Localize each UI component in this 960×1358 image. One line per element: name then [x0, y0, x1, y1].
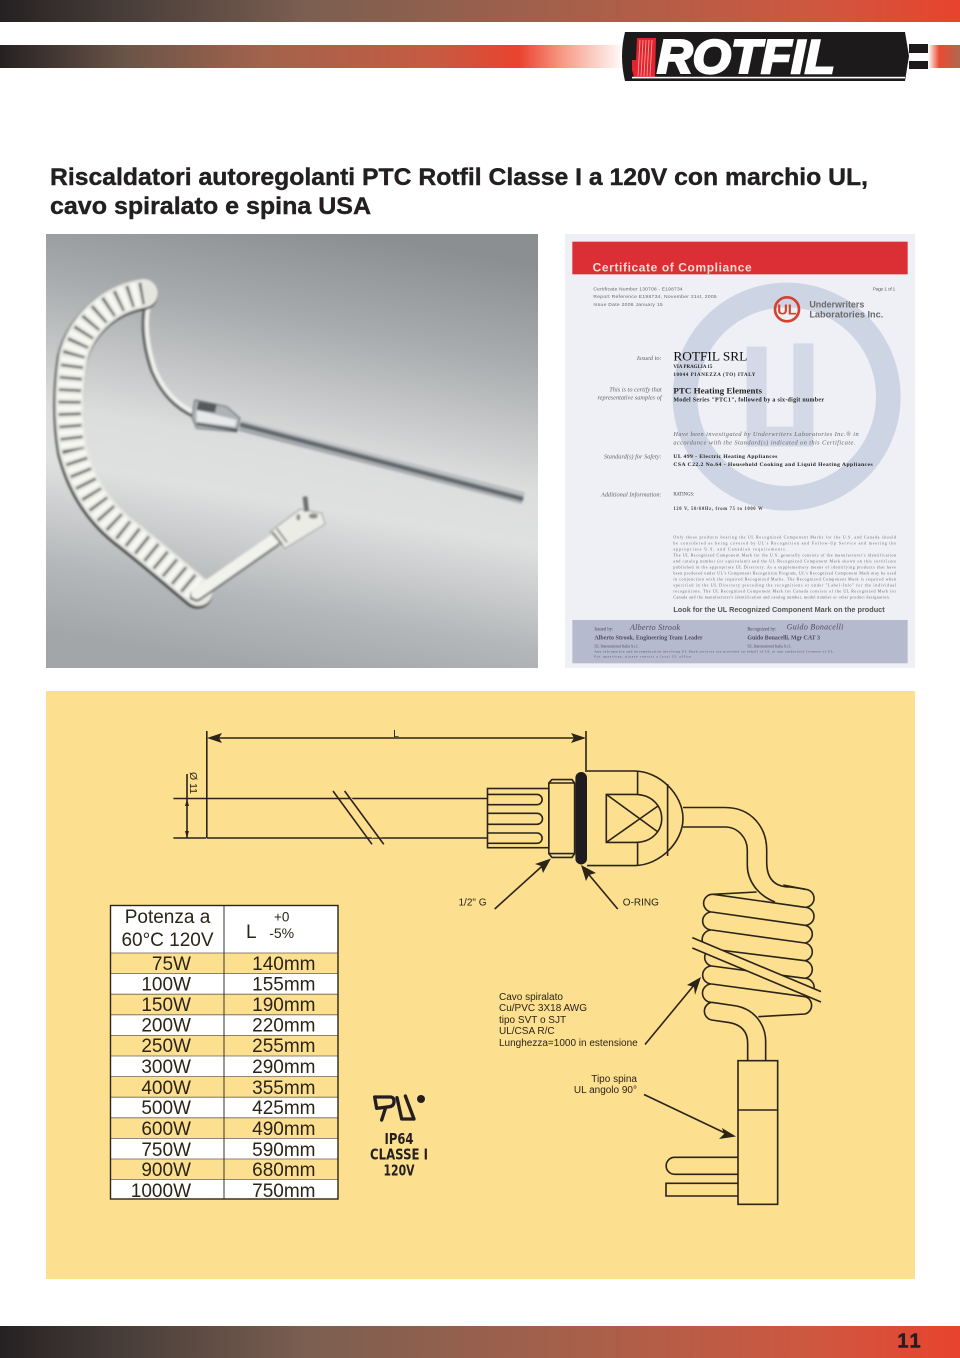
photo: UL certificate of compliance: Alberto Strook, Engineering Team Leader: [594, 635, 703, 641]
table rows: 300W: [141, 1057, 191, 1078]
table header: 60°C 120V: [121, 930, 214, 951]
photo: UL certificate of compliance: CSA C22.2 No.64 - Household Cooking and Liquid Heating Appliances: [673, 462, 873, 468]
photo: UL certificate of compliance: published in the appropriate UL Directory. As a supplementary means of identifying products that have: [673, 565, 896, 570]
table rows: 750mm: [252, 1181, 316, 1202]
photo: UL certificate of compliance: Underwriters: [809, 300, 864, 310]
photo: UL certificate of compliance: Guido Bonacelli, Mgr CAT 3: [747, 635, 820, 641]
text: plug type: UL angolo 90°: [574, 1085, 637, 1096]
table rows: 900W: [141, 1160, 191, 1181]
table rows: 490mm: [252, 1119, 316, 1140]
top header bar: [0, 0, 960, 22]
title: cavo spiralato e spina USA: [50, 193, 371, 220]
table rows: 500W: [141, 1098, 191, 1119]
photo: heating element with coiled cable: [46, 234, 538, 668]
photo: UL certificate of compliance: accordance with the Standard(s) indicated on this Certificate.: [673, 440, 856, 447]
photo: UL certificate of compliance: 10044 PIANEZZA (TO) ITALY: [673, 373, 756, 378]
photo: UL certificate of compliance: UL International Italia S.r.l.: [594, 643, 638, 648]
table header: -5%: [269, 925, 294, 941]
table rows: 150W: [141, 995, 191, 1016]
photo: UL certificate of compliance: The UL Recognized Component Mark for the U.S. generally consists of the manufacturer's identification: [673, 553, 896, 558]
photo: UL certificate of compliance: For questions, please contact a local UL office: [594, 654, 692, 659]
photo: UL certificate of compliance: Standard(s) for Safety:: [604, 454, 662, 461]
plug: [666, 1061, 778, 1204]
photo: UL certificate of compliance: Issue Date 2006 January 15: [593, 302, 663, 308]
O-ring: [575, 772, 587, 864]
photo: UL certificate of compliance: Additional Information:: [600, 491, 662, 498]
photo: UL certificate of compliance: 120 V, 50/60Hz, from 75 to 1000 W: [673, 507, 763, 512]
photo: UL certificate of compliance: Only those products bearing the UL Recognized Component Marks for the U.S. and Canada should: [673, 534, 896, 539]
text: spiral cable specification: [499, 992, 638, 1049]
label: 1/2 inch G: 1/2" G: [458, 898, 487, 908]
table rows: 355mm: [252, 1078, 316, 1099]
knurled nut: [488, 788, 549, 848]
footer bar: [0, 1326, 960, 1358]
text: spiral cable specification: Lunghezza=1000 in estensione: [499, 1038, 638, 1049]
photo: UL certificate of compliance: VIA PRAGLIA 15: [673, 365, 713, 370]
arrow: spiral cable: [645, 977, 701, 1044]
text: spiral cable specification: Cu/PVC 3X18 AWG: [499, 1003, 587, 1014]
heating tube: [207, 791, 488, 844]
photo: UL certificate of compliance: specified in the UL Directory preceding the recognitions or under "Label-Info" for the individual: [673, 583, 897, 588]
table rows: 750W: [141, 1140, 191, 1161]
second header bar fading to white: [0, 45, 625, 68]
panel: technical drawing and table: [46, 691, 915, 1279]
photo: UL certificate of compliance: This is to certify that: [609, 386, 662, 393]
certification text: IP64: [384, 1130, 414, 1148]
table rows: 425mm: [252, 1098, 316, 1119]
photo: UL certificate of compliance: appropriate U.S. and Canadian requirements.: [673, 546, 787, 551]
photo: UL certificate of compliance: Canada and the manufacturer's identification and catalog number, model number or other product designation.: [673, 595, 890, 601]
dimension diameter 11: Ø 11: [187, 772, 199, 794]
table rows: 290mm: [252, 1057, 316, 1078]
certification text: [370, 1130, 428, 1180]
photo: UL certificate of compliance: Report Reference E198734, November 21st, 2005: [593, 294, 717, 300]
table header: [121, 907, 294, 951]
photo: UL certificate of compliance: UL 499 - Electric Heating Appliances: [673, 454, 778, 460]
table header: L: [246, 922, 257, 943]
certification text: 120V: [384, 1162, 415, 1180]
photo: UL certificate of compliance: been produced under UL's Component Recognition Program, UL's Recognized Component Mark may be used: [673, 571, 896, 577]
photo: UL certificate of compliance: representative samples of: [597, 394, 663, 401]
photo: UL certificate of compliance: Look for the UL Recognized Component Mark on the product: [673, 607, 885, 614]
technical drawing: heating element: [173, 728, 821, 1204]
photo: UL certificate of compliance: in conjunction with the required Recognized Marks. The Recognized Component Mark is required when: [673, 577, 896, 582]
photo: UL certificate of compliance: Have been investigated by Underwriters Laboratories Inc.® in: [672, 431, 859, 438]
photo: UL certificate of compliance: and catalog number (or equivalent) and the UL Recognized Component Mark shown on this certificate: [673, 559, 896, 564]
table rows: 1000W: [131, 1181, 191, 1202]
table rows: 220mm: [252, 1016, 316, 1036]
photo: UL certificate of compliance: [565, 234, 915, 668]
table: power and length: [110, 906, 338, 1202]
cable and coil: [683, 808, 805, 902]
arrow: plug: [644, 1094, 736, 1139]
table rows: 200W: [141, 1016, 191, 1036]
certification text: CLASSE I: [370, 1146, 428, 1164]
photo: UL certificate of compliance: UL International Italia S.r.l.: [747, 643, 791, 648]
table rows: 190mm: [252, 995, 316, 1016]
hex nut: [549, 780, 575, 857]
dimension L: [207, 728, 586, 838]
table rows: 155mm: [252, 974, 316, 996]
photo: UL certificate of compliance: Issued to:: [636, 355, 662, 362]
table rows: 140mm: [252, 954, 316, 975]
table rows: 255mm: [252, 1036, 316, 1057]
table header: Potenza a: [125, 907, 211, 928]
photo: UL certificate of compliance: ROTFIL SRL: [673, 350, 747, 364]
table rows: 75W: [152, 954, 191, 975]
photo: UL certificate of compliance: Laboratories Inc.: [809, 310, 883, 320]
label: O-ring: O-RING: [623, 898, 659, 908]
photo: UL certificate of compliance: Certificate Number 130708 - E198734: [593, 287, 683, 293]
UL recognised component mark: [375, 1095, 425, 1120]
page number: 11: [897, 1330, 923, 1352]
text: spiral cable specification: Cavo spiralato: [499, 992, 563, 1003]
photo: UL certificate of compliance: Issued by:: [594, 628, 613, 633]
table header: +0: [274, 910, 289, 924]
connector head: [587, 771, 683, 866]
photo: UL certificate of compliance: Certificate of Compliance: [593, 260, 752, 274]
photo: UL certificate of compliance: Alberto Strook: [629, 623, 680, 632]
text: plug type: Tipo spina: [591, 1074, 637, 1085]
photo: UL certificate of compliance: be considered as being covered by UL's Recognition and Follow-Up Service and meeting the: [673, 540, 896, 545]
dimension L: L: [393, 728, 399, 740]
title: [50, 164, 868, 220]
table rows: 100W: [141, 974, 191, 996]
table rows: 250W: [141, 1036, 191, 1057]
photo: UL certificate of compliance: Page 1 of 1: [873, 287, 896, 293]
logo: Rotfil: [622, 30, 960, 83]
arrow: O-ring: [581, 865, 618, 909]
photo: UL certificate of compliance: Any information and documentation involving UL Mark services are provided on behalf of UL or any authorized licensee of UL.: [594, 650, 834, 654]
title: Riscaldatori autoregolanti PTC Rotfil Classe I a 120V con marchio UL,: [50, 164, 868, 191]
photo: UL certificate of compliance: Guido Bonacelli: [787, 622, 843, 631]
text: plug type: [574, 1074, 637, 1096]
photo: UL certificate of compliance: Model Series "PTC1", followed by a six-digit number: [673, 397, 824, 403]
arrow: 1/2 inch G: [495, 858, 551, 909]
photo: UL certificate of compliance: UL: [777, 303, 797, 319]
photo: UL certificate of compliance: PTC Heating Elements: [673, 385, 763, 395]
dimension diameter 11: [173, 772, 206, 838]
photo: UL certificate of compliance: Recognized by:: [747, 628, 776, 633]
photo: UL certificate of compliance: RATINGS:: [673, 493, 694, 498]
table rows: 590mm: [252, 1140, 316, 1161]
table rows: [131, 954, 316, 1202]
logo: Rotfil: ROTFIL: [657, 30, 835, 83]
text: spiral cable specification: tipo SVT o SJT: [499, 1015, 566, 1026]
photo: UL certificate of compliance: recognitions. The UL Recognized Component Mark for Canada consists of the UL Recognized Mark for: [673, 589, 897, 594]
table rows: 600W: [141, 1119, 191, 1140]
table rows: 400W: [141, 1078, 191, 1099]
text: spiral cable specification: UL/CSA R/C: [499, 1026, 555, 1037]
table rows: 680mm: [252, 1160, 316, 1181]
